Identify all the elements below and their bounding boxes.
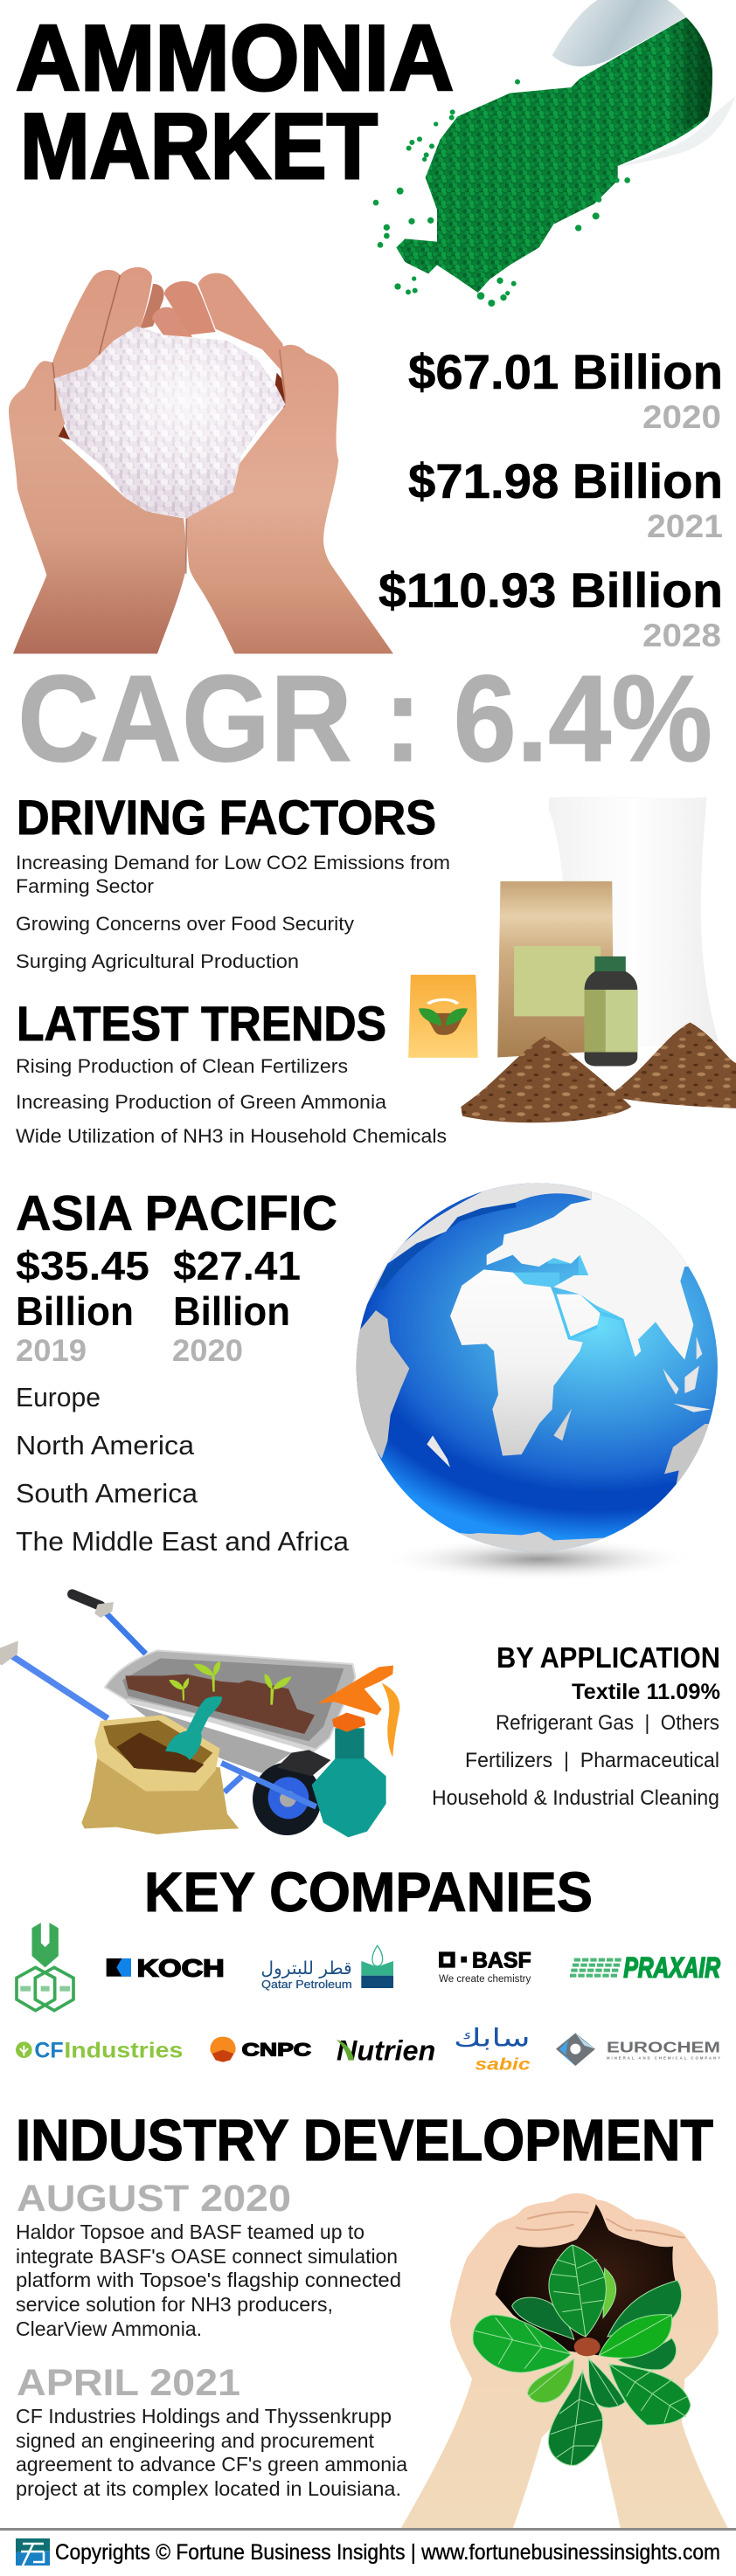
bottle (585, 957, 637, 1067)
logo: Qatar Petroleum (260, 1945, 393, 1991)
seedlings (169, 1661, 291, 1705)
list: latest trends: Increasing Production of Green Ammonia (16, 1091, 386, 1113)
shelf shading (378, 1203, 516, 1287)
hand shading (52, 275, 285, 574)
list: applications: Refrigerant Gas | Others (496, 1711, 719, 1735)
leaves (473, 2245, 691, 2465)
back fingers (140, 284, 164, 329)
logo: EuroChem: EUROCHEM (607, 2038, 720, 2055)
logo: EuroChem (556, 2033, 720, 2066)
heading: latest trends: LATEST TRENDS (17, 996, 386, 1051)
heading: April 2021: APRIL 2021 (17, 2362, 240, 2404)
title: AMMONIA (16, 5, 454, 110)
stat: Asia Pacific 2019 (16, 1243, 149, 1368)
list: latest trends (16, 1055, 447, 1147)
logo: Praxair (570, 1952, 720, 1984)
stat: 2028 market size: $110.93 Billion (378, 563, 723, 618)
heading: key companies: KEY COMPANIES (144, 1861, 593, 1923)
list: applications (432, 1711, 719, 1810)
burlap bag (81, 1715, 239, 1834)
pellets (54, 326, 286, 518)
list: driving factors: Surging Agricultural Production (16, 950, 299, 972)
logos right half (439, 1949, 720, 2075)
stat: 2028 market size (378, 563, 723, 653)
stat: 2020 market size (408, 344, 723, 435)
logos left half (16, 1925, 435, 2066)
ground shadow (382, 1537, 697, 1581)
heading: by application: BY APPLICATION (496, 1641, 720, 1674)
icon: green granules spilling from paper bag (373, 0, 736, 307)
logo: Sabic: sabic (475, 2056, 531, 2075)
text: April 2021 development: project at its complex located in Louisiana. (16, 2477, 401, 2500)
paper bag (552, 0, 686, 66)
text: April 2021 development: signed an engineering and procurement (16, 2429, 375, 2452)
soil (496, 2204, 676, 2356)
organic bag (408, 975, 478, 1058)
New Zealand (427, 1435, 450, 1468)
ocean sphere (357, 1183, 718, 1551)
stat: 2021 market size: 2021 (647, 508, 723, 544)
barrow under body (128, 1703, 291, 1773)
list: driving factors: Farming Sector (16, 875, 155, 897)
stem centre (574, 2338, 601, 2356)
text: August 2020 development: integrate BASF's OASE connect simulation (16, 2245, 398, 2268)
shadow inside palms (52, 373, 291, 439)
text: textile share: Textile 11.09% (572, 1680, 720, 1704)
heading: August 2020: AUGUST 2020 (17, 2178, 291, 2220)
logo: CNPC (210, 2037, 311, 2062)
text: April 2021 development: CF Industries Holdings and Thyssenkrupp (16, 2405, 392, 2428)
soil pile right (614, 1023, 736, 1108)
Africa and Arabia (450, 1269, 601, 1456)
text: April 2021 development (16, 2405, 407, 2500)
spray bottle (312, 1666, 399, 1837)
stat: Asia Pacific 2020: 2020 (172, 1334, 243, 1368)
top land cap and Eurasia (486, 1191, 694, 1359)
logo: BASF (439, 1949, 531, 1985)
list: driving factors: Increasing Demand for Low CO2 Emissions from (16, 852, 450, 874)
logo: Nutrien: Nutrien (337, 2034, 435, 2066)
kraft bag (497, 881, 614, 1058)
list: other regions: North America (16, 1430, 195, 1461)
title (16, 5, 454, 198)
South America (357, 1310, 409, 1459)
stat: 2021 market size: $71.98 Billion (408, 453, 723, 508)
list: latest trends: Wide Utilization of NH3 in Household Chemicals (16, 1125, 447, 1147)
footer (16, 2538, 720, 2566)
granule pile (396, 17, 712, 293)
list: other regions (16, 1382, 350, 1557)
text: April 2021 development: agreement to advance CF's green ammonia (16, 2453, 407, 2476)
scattered granules (373, 79, 630, 307)
logo: EuroChem: MINERAL AND CHEMICAL COMPANY (607, 2056, 720, 2061)
list: applications: Household & Industrial Cleaning (432, 1786, 719, 1810)
soil in tray (125, 1675, 315, 1734)
logo: Sabic: سابك (454, 2023, 531, 2052)
list: other regions: Europe (16, 1382, 101, 1412)
soil pile left (461, 1037, 631, 1122)
icon: globe (350, 1173, 734, 1581)
stat: 2028 market size: 2028 (642, 618, 721, 653)
stat: Asia Pacific 2020: $27.41 (173, 1243, 301, 1288)
photo: hands holding white pellets (9, 267, 393, 653)
logo: RCF (17, 1925, 73, 2011)
logo: CF Industries (16, 2038, 183, 2062)
right hand (186, 345, 393, 653)
logo: CF Industries: CF (34, 2038, 64, 2062)
text: August 2020 development: platform with Topsoe's flagship connected (16, 2269, 401, 2291)
icon: Fortune Business Insights logo (16, 2538, 50, 2566)
stat: 2020 market size: $67.01 Billion (408, 344, 723, 399)
list: driving factors: Growing Concerns over Food Security (16, 913, 355, 935)
illustration: fertilizer packaging and soil (408, 797, 736, 1122)
Madagascar (553, 1409, 572, 1440)
logo: Sabic (454, 2023, 531, 2075)
Southeast Asia islands (663, 1336, 711, 1412)
list: driving factors (16, 852, 450, 972)
green label (514, 946, 601, 1016)
title: MARKET (20, 93, 378, 198)
scoop (165, 1696, 222, 1760)
finger shading (516, 2212, 684, 2238)
list: applications: Fertilizers | Pharmaceutical (465, 1749, 719, 1772)
stat: Asia Pacific 2019: $35.45 (16, 1243, 149, 1288)
stat: Asia Pacific 2019: Billion (16, 1288, 134, 1334)
logo: CNPC: CNPC (242, 2039, 311, 2060)
hands (400, 2193, 728, 2529)
left hand (9, 267, 186, 653)
stat: Asia Pacific 2020 (172, 1243, 301, 1368)
stat: 2021 market size (408, 453, 723, 544)
stat: Asia Pacific 2019: 2019 (16, 1334, 87, 1368)
logo: Qatar Petroleum: قطر للبترول (260, 1958, 352, 1979)
illustration: wheelbarrow, fertilizer bag and spray bottle (0, 1594, 399, 1837)
list: latest trends: Rising Production of Clean Fertilizers (16, 1055, 348, 1077)
text: August 2020 development: ClearView Ammonia. (16, 2317, 202, 2340)
logo: Koch: KOCH (137, 1954, 225, 1981)
barrow tray (105, 1650, 356, 1751)
wheel (253, 1750, 330, 1835)
barrow handle front (0, 1640, 108, 1718)
stat: Asia Pacific 2020: Billion (173, 1288, 290, 1334)
text: August 2020 development: service solution for NH3 producers, (16, 2293, 333, 2316)
logo: Koch (107, 1954, 225, 1981)
logo: CF Industries: Industries (64, 2038, 183, 2062)
Australia (664, 1424, 709, 1484)
white sack (549, 797, 719, 1051)
Arctic and North America rim (367, 1183, 592, 1305)
logo: Qatar Petroleum: Qatar Petroleum (261, 1979, 352, 1991)
heading: driving factors: DRIVING FACTORS (17, 790, 436, 845)
Antarctica (458, 1531, 603, 1551)
logo: BASF: We create chemistry (439, 1972, 531, 1985)
logo: BASF: BASF (472, 1949, 531, 1972)
list: other regions: South America (16, 1478, 198, 1509)
list: other regions: The Middle East and Africa (16, 1526, 350, 1557)
heading: Asia Pacific: ASIA PACIFIC (16, 1185, 337, 1241)
text: August 2020 development (16, 2220, 401, 2340)
stat: 2020 market size: 2020 (642, 399, 721, 435)
text: August 2020 development: Haldor Topsoe and BASF teamed up to (16, 2220, 365, 2243)
photo: hands holding soil and plant (400, 2193, 728, 2529)
barrow leg and tube (221, 1763, 316, 1806)
divider (0, 2528, 736, 2531)
barrow handle back (73, 1594, 146, 1654)
